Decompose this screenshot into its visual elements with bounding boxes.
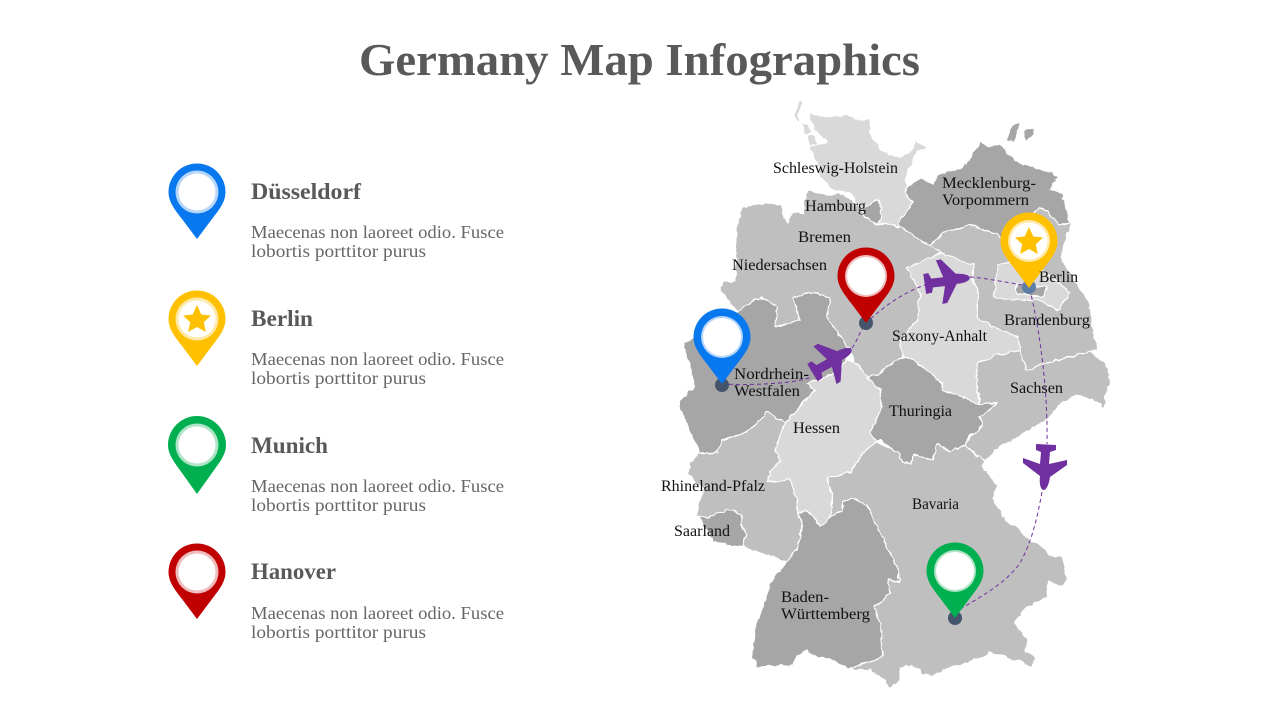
heading: Düsseldorf: Düsseldorf xyxy=(251,179,361,204)
map labels: Hamburg xyxy=(805,198,866,215)
map labels: Niedersachsen xyxy=(732,257,827,274)
marker: Hanover pin xyxy=(838,248,894,330)
state: Schleswig-Holstein xyxy=(795,101,927,227)
state: Saxony-Anhalt xyxy=(900,253,1020,405)
map labels: Rhineland-Pfalz xyxy=(661,478,765,495)
state: Niedersachsen xyxy=(720,190,942,378)
description: Munich: Maecenas non laoreet odio. Fusce xyxy=(251,476,504,496)
map labels: Berlin xyxy=(1039,269,1078,286)
map labels: Vorpommern xyxy=(942,192,1029,209)
title: Germany Map Infographics xyxy=(359,34,920,85)
legend item: Hanover xyxy=(168,544,504,642)
marker: Berlin pin xyxy=(1000,212,1058,294)
state: Saarland xyxy=(697,509,747,547)
icon: blue pin xyxy=(168,164,226,239)
legend item: Munich xyxy=(168,416,504,515)
map labels: Schleswig-Holstein xyxy=(773,160,898,177)
panel: city legend xyxy=(168,164,504,642)
icon: airplane 2 xyxy=(920,255,974,307)
state: Bavaria xyxy=(827,442,1067,688)
map labels: Württemberg xyxy=(781,606,870,623)
map labels: Bavaria xyxy=(912,496,959,513)
map labels: Mecklenburg- xyxy=(942,175,1036,192)
state: Baden-Württemberg xyxy=(752,498,900,670)
map labels: Westfalen xyxy=(734,383,800,400)
map labels: Saarland xyxy=(674,523,730,540)
state: Thuringia xyxy=(868,358,998,463)
icon: airplane 1 xyxy=(800,330,863,392)
map labels: Saxony-Anhalt xyxy=(892,328,988,345)
description: Düsseldorf: Maecenas non laoreet odio. Fusce xyxy=(251,222,504,242)
description: Düsseldorf: lobortis porttitor purus xyxy=(251,241,426,261)
state: Rhineland-Pfalz xyxy=(687,412,802,562)
map labels: Nordrhein- xyxy=(734,366,809,383)
map labels: Thuringia xyxy=(889,403,952,420)
state: inner Berlin surroundings xyxy=(993,260,1070,310)
state: Nordrhein-Westfalen xyxy=(678,292,848,453)
description: Hanover: lobortis porttitor purus xyxy=(251,622,426,642)
map labels: Brandenburg xyxy=(1004,312,1090,329)
description: Munich xyxy=(251,476,504,515)
icon: green pin xyxy=(168,416,226,494)
description: Berlin: Maecenas non laoreet odio. Fusce xyxy=(251,349,504,369)
icon: yellow star pin xyxy=(168,290,226,366)
icon: airplane 3 xyxy=(1023,444,1067,490)
heading: Munich: Munich xyxy=(251,433,328,458)
description: Berlin xyxy=(251,349,504,388)
marker: Düsseldorf pin xyxy=(694,308,750,392)
chart: Germany map xyxy=(678,101,1110,688)
description: Munich: lobortis porttitor purus xyxy=(251,495,426,515)
map labels: Bremen xyxy=(798,229,851,246)
icon: red pin xyxy=(168,544,226,619)
heading: Berlin: Berlin xyxy=(251,306,313,331)
state: Sachsen xyxy=(965,350,1110,462)
state: Brandenburg xyxy=(930,207,1097,370)
legend item: Berlin xyxy=(168,290,504,388)
heading: Hanover: Hanover xyxy=(251,559,336,584)
state: Hessen xyxy=(768,360,882,527)
state: Hamburg xyxy=(863,200,882,225)
marker: Munich pin xyxy=(926,542,984,625)
description: Hanover xyxy=(251,603,504,642)
map labels xyxy=(661,160,1090,623)
flight route xyxy=(722,277,1047,612)
map labels: Hessen xyxy=(793,420,840,437)
map labels: Baden- xyxy=(781,589,829,606)
legend item: Düsseldorf xyxy=(168,164,504,261)
state: Berlin xyxy=(1017,284,1047,297)
state: Mecklenburg-Vorpommern xyxy=(898,123,1070,245)
description: Berlin: lobortis porttitor purus xyxy=(251,368,426,388)
description: Hanover: Maecenas non laoreet odio. Fusce xyxy=(251,603,504,623)
description: Düsseldorf xyxy=(251,222,504,261)
map labels: Sachsen xyxy=(1010,380,1063,397)
